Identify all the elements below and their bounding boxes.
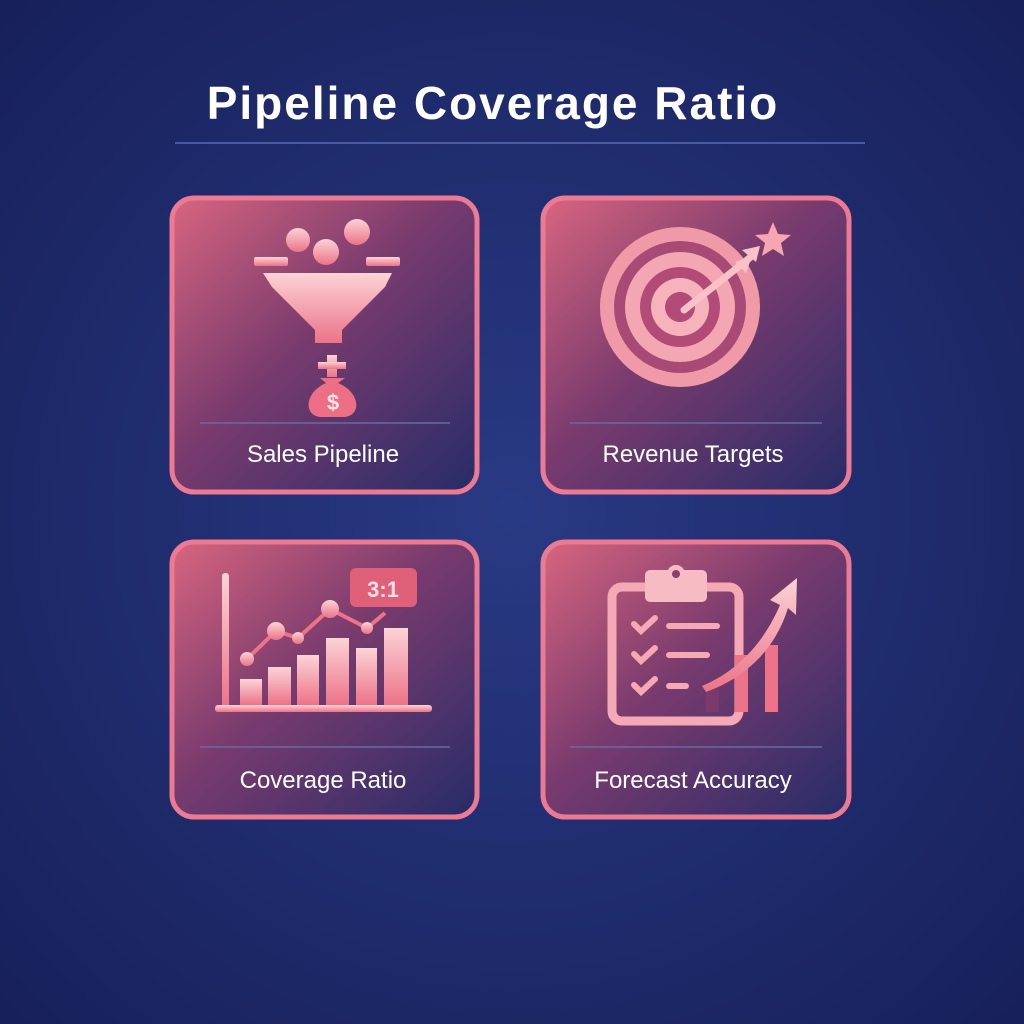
label: Forecast Accuracy	[594, 767, 792, 794]
label: Revenue Targets	[602, 441, 784, 468]
panel: sales pipeline	[172, 198, 477, 492]
panel: forecast accuracy	[543, 542, 849, 817]
icon: funnel	[254, 219, 400, 417]
label: Sales Pipeline	[247, 441, 399, 468]
panel: revenue targets	[543, 198, 849, 492]
chart: bars and line	[215, 568, 432, 712]
label: Coverage Ratio	[240, 767, 406, 794]
panel: coverage ratio: 3:1	[367, 577, 399, 602]
title: Pipeline Coverage Ratio	[207, 77, 779, 129]
icon: clipboard with arrow	[612, 565, 797, 721]
panel: sales pipeline: $	[327, 390, 339, 415]
icon: target	[600, 222, 791, 387]
panel: coverage ratio	[172, 542, 477, 817]
